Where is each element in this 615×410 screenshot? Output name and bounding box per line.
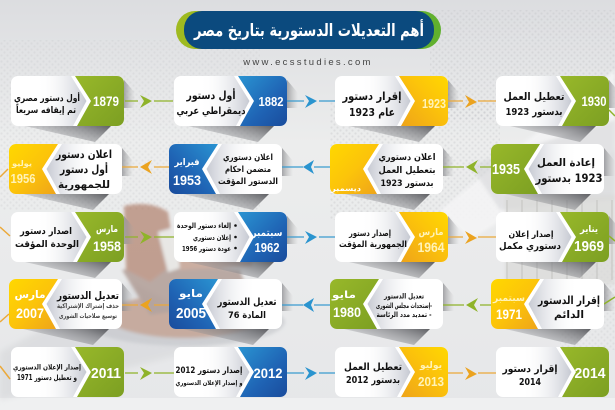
card: March 2007: توسيع صلاحيات الشورى: [59, 312, 117, 320]
arrow: 1882 to 1923: [287, 95, 335, 108]
card: December: اعلان دستوري: [378, 153, 436, 163]
card: 1923: 1923: [422, 96, 446, 111]
card: 1882: 1882: [258, 94, 284, 109]
arrow: 1930 to 1935 wrap: [609, 110, 615, 116]
card: 2012: و إصدار الإعلان الدستوري: [176, 379, 242, 387]
arrow: 1980 to 2005: [281, 298, 330, 312]
card: 2011: و تعطيل دستور 1971: [17, 373, 77, 382]
card: September 1962: 1962: [254, 240, 280, 255]
card: 1923: [335, 76, 448, 126]
card: May 1980: [330, 279, 443, 329]
arrow: December to 1953: [281, 160, 330, 174]
card: September 1962: عودة دستور 1956: [182, 245, 231, 253]
arrow: 1958 to 1962: [125, 231, 174, 244]
card: March 1958: [11, 212, 124, 262]
card: 1956: اعلان دستور: [55, 148, 112, 161]
card: 1953: الدستور المؤقت: [218, 177, 278, 187]
arrow: 1964 to 1969: [448, 231, 496, 244]
card: December: بتعطيل العمل: [378, 166, 436, 176]
card: 1935: [491, 144, 604, 194]
title navy bar: [184, 11, 434, 49]
card: 2011: 2011: [91, 365, 121, 382]
card: January 1969: 1969: [574, 239, 604, 255]
card: May 2005: 2005: [176, 306, 206, 322]
card: May 1980: مايو: [331, 290, 356, 301]
card: September 1962: إلغاء دستور الوحدة: [177, 222, 231, 230]
card: 1956: [9, 144, 122, 194]
arrow: 1953 to 1956: [122, 160, 169, 174]
card: May 1980: 1980: [333, 304, 361, 320]
card: March 2007: مارس: [14, 289, 46, 301]
card: September 1971: 1971: [496, 306, 522, 322]
card: September 1962: [174, 212, 287, 262]
card: 1882: أول دستور: [186, 88, 236, 102]
arrow: 1923 to 1930: [448, 95, 496, 108]
card: 2012: إصدار دستور 2012: [176, 366, 243, 376]
card: 1923: إقرار دستور: [342, 89, 402, 104]
card: 2014: إقرار دستور: [502, 364, 558, 375]
arrow: 2012 to 2013: [287, 367, 335, 380]
card: January 1969: [496, 212, 609, 262]
card: December: ديسمبر: [330, 184, 361, 193]
card: July 2013: 2013: [418, 374, 444, 389]
card: December: [330, 144, 443, 194]
card: 2012: 2012: [254, 365, 283, 381]
card: 1953: 1953: [173, 172, 201, 188]
card: March 1964: 1964: [418, 239, 445, 255]
arrow: 1879 to 1882: [125, 95, 173, 108]
card: 1953: فبراير: [174, 157, 200, 168]
arrow: 1971 to 1980: [442, 298, 491, 312]
card: 2011: إصدار الإعلان الدستوري: [13, 364, 81, 372]
card: 2014: 2014: [519, 377, 541, 388]
title green backing: [176, 11, 441, 49]
card: 1882: ديمقراطي عربي: [176, 106, 246, 117]
card: 2014: [496, 347, 609, 397]
card: January 1969: دستوري مكمل: [499, 241, 561, 252]
card: 1930: 1930: [582, 93, 607, 109]
website url: www.ecsstudies.com: [242, 57, 373, 68]
title banner: [176, 11, 441, 49]
card: 1879: تم إيقافه سريعاً: [15, 103, 76, 116]
arrow: 1956 to 1958 wrap: [0, 169, 10, 236]
card: July 2013: تعطيل العمل: [344, 362, 402, 373]
card: 1956: يوليو: [11, 159, 32, 168]
card: July 2013: [335, 347, 448, 397]
card: March 1964: الجمهورية المؤقت: [339, 240, 407, 250]
card: July 2013: يوليو: [419, 361, 442, 371]
card: September 1971: الدائم: [554, 309, 584, 321]
card: March 1958: مارس: [96, 224, 118, 235]
card: 1953: [169, 144, 282, 194]
card: March 1958: الوحدة المؤقت: [15, 239, 79, 250]
card: 2014: 2014: [574, 365, 606, 382]
card: May 1980: - تمديد مدد الرئاسة: [376, 311, 432, 319]
card: March 1964: مارس: [418, 227, 444, 238]
card: 1879: أول دستور مصري: [14, 92, 80, 104]
card: March 1964: إصدار دستور: [348, 229, 391, 239]
card: 1935: 1935: [492, 161, 520, 178]
card: March 2007: حذف إشتراك الإشتراكية: [57, 302, 119, 310]
card: 1956: أول دستور: [59, 162, 108, 176]
card: September 1971: [491, 279, 604, 329]
image: faded gavel and sound block: [85, 204, 285, 346]
arrow: 2013 to 2014: [448, 367, 496, 380]
card: 1935: 1923 بدستور: [535, 171, 602, 186]
title text: أهم التعديلات الدستورية بتاريخ مصر: [193, 19, 424, 41]
card: January 1969: إصدار إعلان: [508, 230, 554, 240]
card: 1935: إعادة العمل: [537, 157, 595, 169]
card: May 1980: -إستحداث مجلس الشورى: [376, 302, 432, 310]
card: 1923: عام 1923: [349, 106, 395, 119]
card: March 1958: اصدار دستور: [19, 226, 72, 237]
arrow: 1962 to 1964: [287, 231, 335, 244]
card: 1930: بدستور 1923: [506, 107, 562, 118]
card: March 1964: [335, 212, 448, 262]
arrow: 2007 to 2011 wrap: [0, 314, 10, 379]
card: May 2005: [169, 279, 282, 329]
arrow: 2011 to 2012: [125, 367, 174, 380]
card: September 1962: إعلان دستوري: [193, 234, 231, 242]
card: 1882: [174, 76, 287, 126]
card: 1956: 1956: [10, 171, 36, 186]
card: 1956: للجمهورية: [58, 179, 110, 191]
card: 2011: [11, 347, 124, 397]
card: March 1958: 1958: [93, 238, 121, 254]
card: 1930: تعطيل العمل: [504, 91, 565, 103]
arrow: 2005 to 2007: [122, 298, 169, 312]
card: May 2005: المادة 76: [228, 311, 266, 321]
card: September 1971: إقرار الدستور: [537, 294, 600, 307]
card: 1879: [11, 76, 124, 126]
card: July 2013: بدستور 2012: [346, 375, 400, 386]
card: March 2007: 2007: [16, 305, 44, 321]
card: January 1969: يناير: [579, 224, 598, 235]
card: September 1962: سبتمبر: [251, 228, 283, 239]
card: March 2007: [9, 279, 122, 329]
arrow: 1935 to December: [442, 160, 491, 174]
card: March 2007: تعديل الدستور: [56, 290, 119, 302]
card: May 1980: تعديل الدستور: [383, 292, 424, 300]
card: December: بدستور 1923: [380, 179, 434, 189]
arrow: 1969 to 1971 wrap: [604, 236, 615, 304]
card: 1930: [496, 76, 609, 126]
card: 1953: متضمن احكام: [225, 165, 271, 175]
card: May 2005: مايو: [178, 288, 203, 300]
card: 2012: [174, 347, 287, 397]
card: 1953: اعلان دستوري: [223, 153, 273, 163]
card: 1879: 1879: [93, 93, 119, 109]
card: September 1971: سبتمبر: [492, 293, 525, 304]
card: May 2005: تعديل الدستور: [217, 297, 277, 308]
